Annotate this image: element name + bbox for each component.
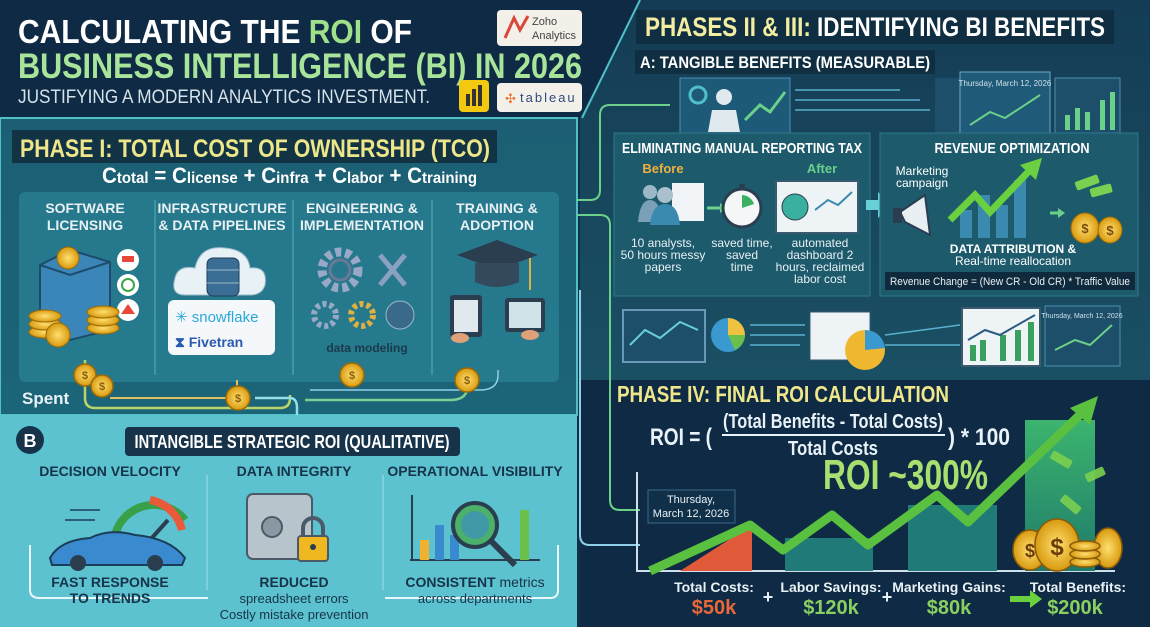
flow lines and coins: $ bbox=[82, 370, 88, 382]
panel: eliminating manual reporting bbox=[614, 133, 870, 296]
totals row: + bbox=[882, 587, 892, 607]
top screen strip: Thursday, March 12, 2026 bbox=[959, 79, 1052, 88]
column: software licensing: LICENSING bbox=[47, 217, 123, 233]
sub heading A: A: TANGIBLE BENEFITS (MEASURABLE) bbox=[640, 53, 930, 72]
column: engineering: data modeling bbox=[326, 341, 408, 355]
column: operational visibility: across departments bbox=[418, 591, 533, 606]
column: infrastructure: INFRASTRUCTURE bbox=[157, 200, 287, 216]
column: data integrity: spreadsheet errors bbox=[239, 591, 349, 606]
panel: eliminating manual reporting: ELIMINATING MANUAL REPORTING TAX bbox=[622, 140, 862, 157]
panel: eliminating manual reporting: After bbox=[807, 161, 837, 176]
panel: eliminating manual reporting: hours, reclaimed bbox=[776, 260, 864, 274]
panel: revenue optimization: Marketing bbox=[896, 164, 948, 178]
totals row bbox=[674, 579, 1126, 619]
panel: revenue optimization: campaign bbox=[896, 176, 948, 190]
inner cost panel bbox=[19, 192, 559, 382]
top screen strip bbox=[680, 72, 1120, 134]
date box bbox=[648, 490, 735, 523]
panel: eliminating manual reporting: 10 analysts, bbox=[631, 236, 695, 250]
flow lines and coins: $ bbox=[464, 375, 470, 387]
left connectors into right column bbox=[577, 105, 670, 545]
money bags: $ bbox=[1050, 534, 1064, 561]
ROI formula: (Total Benefits - Total Costs) bbox=[723, 411, 943, 433]
title: BUSINESS INTELLIGENCE (BI) IN 2026 bbox=[18, 47, 582, 86]
second screen strip bbox=[623, 306, 1123, 370]
column: software licensing: SOFTWARE bbox=[45, 200, 125, 216]
logo: zoho analytics: Analytics bbox=[532, 30, 577, 42]
panel: eliminating manual reporting: saved time, bbox=[711, 236, 773, 250]
date box: March 12, 2026 bbox=[653, 508, 729, 520]
panel: eliminating manual reporting: time bbox=[731, 260, 754, 274]
panel: revenue optimization: REVENUE OPTIMIZATION bbox=[934, 140, 1090, 157]
column: infrastructure: ⧗ Fivetran bbox=[175, 334, 243, 350]
column: decision velocity: DECISION VELOCITY bbox=[39, 463, 181, 479]
flow lines and coins: $ bbox=[99, 381, 105, 393]
column: engineering: ENGINEERING & bbox=[306, 200, 418, 216]
logo: tableau: tableau bbox=[520, 90, 577, 105]
column: data integrity: REDUCED bbox=[259, 574, 329, 590]
ROI result: ROI ~300% bbox=[823, 451, 988, 498]
logo: tableau: ✣ bbox=[505, 91, 516, 106]
logo: zoho analytics bbox=[497, 10, 582, 46]
panel: eliminating manual reporting: saved bbox=[726, 248, 758, 262]
totals row: $50k bbox=[692, 597, 737, 619]
ROI formula: ROI = ( bbox=[650, 424, 712, 451]
flow lines and coins: $ bbox=[349, 370, 355, 382]
phase IV heading: PHASE IV: FINAL ROI CALCULATION bbox=[617, 381, 949, 407]
ROI formula: Total Costs bbox=[788, 438, 878, 460]
panel: revenue optimization: $ bbox=[1081, 221, 1089, 236]
column: engineering bbox=[300, 200, 424, 355]
ROI formula bbox=[650, 411, 1010, 460]
flow lines and coins: $ bbox=[235, 393, 241, 405]
column: operational visibility bbox=[387, 463, 563, 606]
panel: B intangible bbox=[0, 415, 577, 627]
phase II heading: PHASES II & III: IDENTIFYING BI BENEFITS bbox=[645, 12, 1105, 42]
panel: eliminating manual reporting: dashboard 2 bbox=[787, 248, 854, 262]
panel: phases II & III bbox=[614, 10, 1138, 370]
column: data integrity bbox=[220, 463, 368, 622]
header bbox=[0, 0, 640, 118]
panel: eliminating manual reporting: labor cost bbox=[794, 272, 847, 286]
badge B: B bbox=[24, 431, 36, 451]
totals row: + bbox=[763, 587, 773, 607]
column: decision velocity: TO TRENDS bbox=[70, 590, 150, 606]
panel: eliminating manual reporting: Before bbox=[642, 161, 684, 176]
column: operational visibility: OPERATIONAL VISIBILITY bbox=[387, 463, 563, 479]
second screen strip: Thursday, March 12, 2026 bbox=[1041, 313, 1123, 320]
money bags bbox=[1013, 450, 1122, 571]
money bags: $ bbox=[1025, 541, 1035, 561]
badge B bbox=[16, 426, 44, 454]
phase I heading: PHASE I: TOTAL COST OF OWNERSHIP (TCO) bbox=[20, 135, 490, 163]
B heading bbox=[125, 427, 460, 456]
totals row: $120k bbox=[803, 597, 860, 619]
panel: eliminating manual reporting: automated bbox=[792, 236, 848, 250]
subtitle: JUSTIFYING A MODERN ANALYTICS INVESTMENT. bbox=[18, 87, 430, 108]
panel: eliminating manual reporting: papers bbox=[645, 260, 681, 274]
column: engineering: IMPLEMENTATION bbox=[300, 217, 424, 233]
totals row: $80k bbox=[927, 597, 972, 619]
column: operational visibility: CONSISTENT metrics bbox=[405, 574, 545, 590]
panel: revenue optimization: Real-time reallocation bbox=[955, 254, 1071, 268]
flow lines and coins bbox=[74, 360, 498, 418]
totals row: $200k bbox=[1047, 597, 1104, 619]
column: data integrity: Costly mistake prevention bbox=[220, 607, 368, 622]
totals row: Total Costs: bbox=[674, 579, 754, 595]
column: training: TRAINING & bbox=[456, 200, 538, 216]
chart bbox=[637, 396, 1122, 572]
panel: eliminating manual reporting: 50 hours messy bbox=[621, 248, 705, 262]
column: infrastructure: ✳ snowflake bbox=[175, 309, 258, 326]
totals row: Labor Savings: bbox=[780, 579, 882, 595]
column: training: ADOPTION bbox=[460, 217, 534, 233]
logo: power bi bbox=[459, 80, 489, 112]
title: CALCULATING THE ROI OF bbox=[18, 13, 412, 50]
B heading: INTANGIBLE STRATEGIC ROI (QUALITATIVE) bbox=[134, 432, 450, 452]
totals row: Total Benefits: bbox=[1030, 579, 1126, 595]
column: software licensing bbox=[29, 200, 139, 347]
label spent: Spent bbox=[22, 389, 70, 408]
title bbox=[18, 13, 582, 86]
logo: zoho analytics: Zoho bbox=[532, 16, 557, 28]
panel: revenue optimization: $ bbox=[1106, 223, 1114, 238]
column: data integrity: DATA INTEGRITY bbox=[237, 463, 352, 479]
logo: tableau bbox=[497, 83, 582, 112]
panel: revenue optimization: DATA ATTRIBUTION & bbox=[950, 242, 1077, 256]
totals row: Marketing Gains: bbox=[892, 579, 1006, 595]
column: training bbox=[450, 200, 545, 343]
column: infrastructure: & DATA PIPELINES bbox=[158, 217, 286, 233]
panel: phase IV bbox=[617, 381, 1126, 619]
formula TCO: Ctotal = Clicense + Cinfra + Clabor + Ctraining bbox=[102, 163, 477, 188]
panel: revenue optimization bbox=[880, 133, 1138, 296]
column: decision velocity bbox=[39, 463, 185, 606]
panel: revenue optimization: Revenue Change = (New CR - Old CR) * Traffic Value bbox=[890, 276, 1130, 288]
panel: phase I TCO bbox=[0, 118, 577, 418]
date box: Thursday, bbox=[667, 494, 715, 506]
column: decision velocity: FAST RESPONSE bbox=[51, 574, 169, 590]
ROI formula: ) * 100 bbox=[948, 424, 1010, 451]
arrow between panels bbox=[866, 192, 890, 218]
column: infrastructure bbox=[157, 200, 287, 355]
